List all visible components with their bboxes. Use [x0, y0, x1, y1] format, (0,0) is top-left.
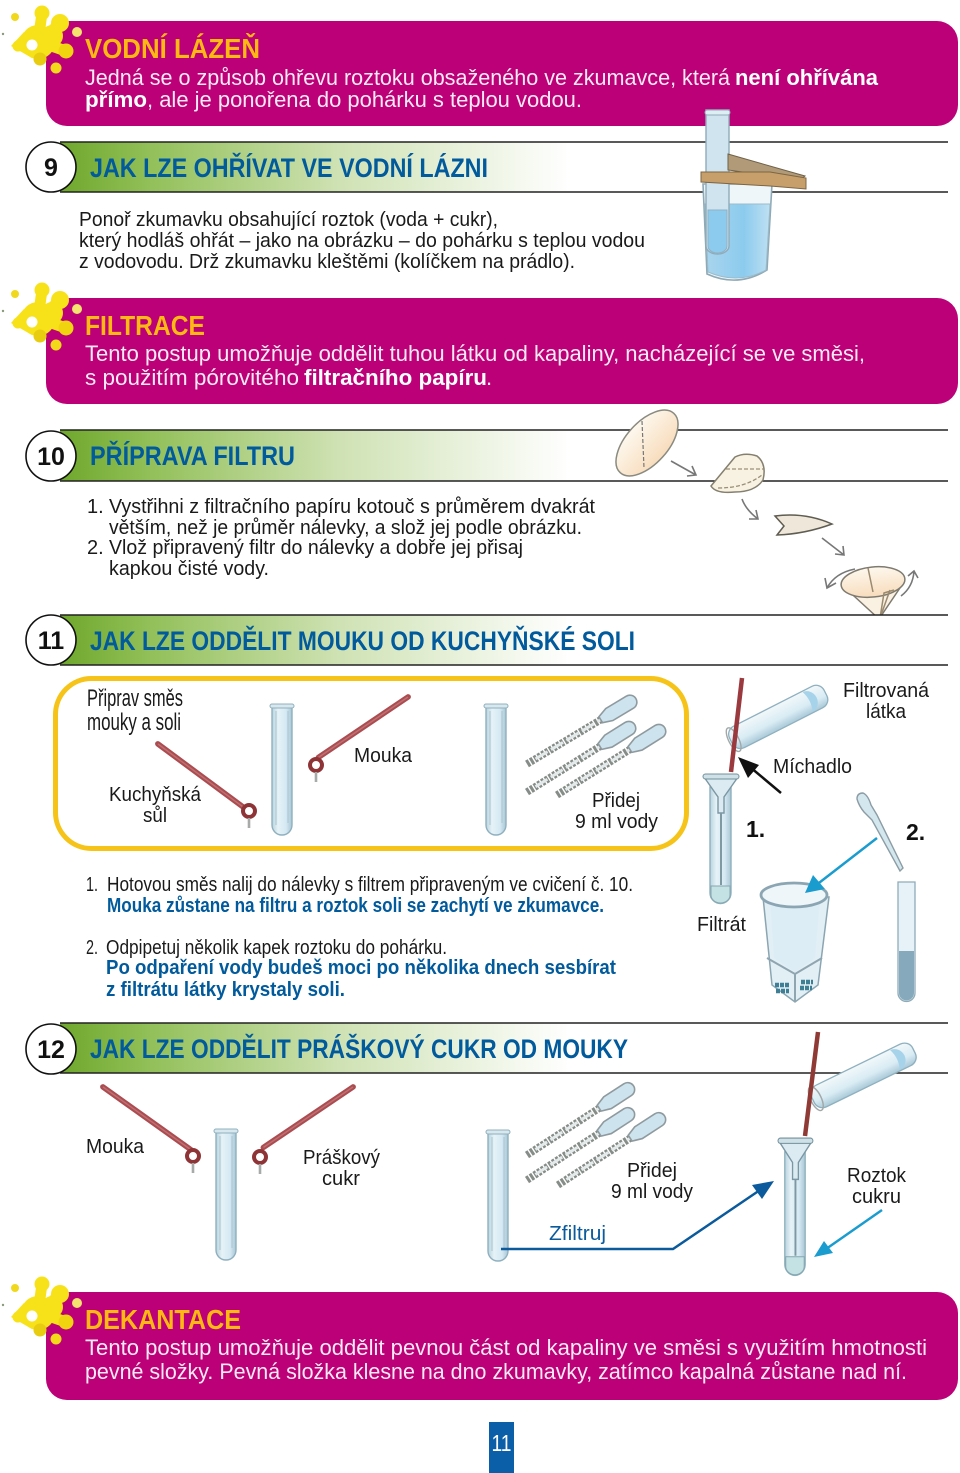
illustration: filtering step 2 [761, 793, 925, 1002]
panel: vodní lázeň [2, 6, 958, 126]
heading: dekantace: DEKANTACE [85, 1304, 241, 1335]
icon: sugar spatula [254, 1087, 353, 1174]
icon: test tube with solution [898, 882, 915, 1002]
arrow: pipette to beaker [805, 838, 877, 893]
panel: dekantace [2, 1276, 958, 1400]
page number [489, 1422, 514, 1473]
icon: yellow splash [2, 6, 82, 74]
number 9: 9 [44, 154, 58, 182]
icon: beaker with crystals [761, 883, 829, 1002]
number 11: 11 [38, 627, 64, 655]
label: sugar solution: cukru [852, 1186, 901, 1208]
icon: salt spatula [158, 744, 255, 828]
text block: section 9 instructions: který hodláš ohřát – jako na obrázku – do pohárku s teplou vodou [79, 230, 645, 252]
text block: section 11 instructions: z filtrátu látky krystaly soli. [106, 979, 345, 1001]
icon: half fold [711, 454, 764, 492]
label: powdered sugar: Práškový [303, 1147, 380, 1169]
text block: section 11 instructions: Odpipetuj několik kapek roztoku do pohárku. [106, 937, 447, 959]
text: bold emphasis: není ohřívána [735, 65, 879, 90]
icon: funnel in test tube [778, 1138, 813, 1275]
text block: section 11 instructions: Hotovou směs nalij do nálevky s filtrem připraveným ve cvičení č. 10. [107, 874, 633, 896]
text: bold emphasis line 2: přímo [85, 87, 147, 112]
arrows between the folding steps [671, 461, 918, 596]
text block: section 11 instructions [86, 874, 633, 1001]
panel: prepare mixture [56, 678, 686, 848]
label: prepare mixture [87, 685, 183, 736]
icon: yellow splash [2, 282, 82, 350]
text block: section 10 steps: větším, než je průměr nálevky, a slož jej podle obrázku. [109, 517, 582, 539]
text block: section 10 steps: kapkou čisté vody. [109, 558, 269, 580]
text: bold emphasis: filtračního papíru [304, 365, 487, 390]
icon: three pipettes [523, 693, 668, 801]
label: filtrate: Filtrát [697, 914, 746, 936]
text block: section 11 instructions: 2. [86, 937, 98, 959]
label: salt: Kuchyňská [109, 784, 202, 806]
text: description line 2: , ale je ponořena do pohárku s teplou vodou. [147, 87, 582, 112]
text: description line 2: s použitím pórovitého [85, 365, 299, 390]
text: period: . [486, 365, 492, 390]
label: flour: Mouka [86, 1136, 145, 1158]
icon: flour spatula [310, 697, 408, 782]
label: salt: sůl [143, 805, 167, 827]
text block: section 10 steps: 2. [87, 537, 104, 559]
label: filtered substance: látka [866, 701, 907, 723]
text block: section 10 steps: Vystřihni z filtračního papíru kotouč s průměrem dvakrát [109, 496, 595, 518]
text block: section 9 instructions: z vodovodu. Drž zkumavku kleštěmi (kolíčkem na prádlo). [79, 251, 575, 273]
label: filtered substance [843, 680, 930, 723]
text block: section 11 instructions: 1. [86, 874, 98, 896]
label: add water: 9 ml vody [611, 1181, 693, 1203]
icon: funnel in test tube [703, 774, 739, 904]
number 10: 10 [37, 443, 65, 471]
heading: filtrace: FILTRACE [85, 310, 205, 341]
icon: quarter fold [775, 515, 832, 535]
text: description line 2: pevné složky. Pevná složka klesne na dno zkumavky, zatímco kapalná zůstane nad ní. [85, 1359, 907, 1384]
label: filter: Zfiltruj [549, 1223, 606, 1245]
text block: section 9 instructions [79, 209, 645, 273]
label: add water [575, 790, 658, 833]
label: sugar solution: Roztok [847, 1165, 907, 1187]
icon: stirring rod [805, 1032, 818, 1136]
label: sugar solution [847, 1165, 907, 1208]
text block: section 10 steps [87, 496, 595, 580]
heading: section 11: JAK LZE ODDĚLIT MOUKU OD KUCHYŇSKÉ SOLI [90, 625, 635, 656]
icon: three pipettes [523, 1080, 668, 1191]
heading: vodní lázeň: VODNÍ LÁZEŇ [85, 33, 260, 64]
icon: test tube [214, 1129, 238, 1260]
label: filtered substance: Filtrovaná [843, 680, 930, 702]
icon: test tube [486, 1130, 510, 1261]
heading: section 9: JAK LZE OHŘÍVAT VE VODNÍ LÁZNI [90, 152, 488, 183]
label: prepare mixture: mouky a soli [87, 709, 181, 736]
icon: filter cone [840, 564, 906, 619]
label: powdered sugar: cukr [322, 1168, 360, 1190]
label: add water: Přidej [592, 790, 640, 812]
icon: stirring rod [731, 678, 742, 772]
icon: pipette [857, 793, 903, 871]
label: add water: Přidej [627, 1160, 677, 1182]
label: flour: Mouka [354, 745, 413, 767]
number 12: 12 [37, 1036, 65, 1064]
label: add water: 9 ml vody [575, 811, 658, 833]
section header 9 [26, 142, 948, 192]
label: step 2: 2. [906, 819, 925, 845]
illustration: filtering step 1 [697, 678, 930, 936]
label: powdered sugar [303, 1147, 380, 1190]
text block: section 11 instructions: Po odpaření vody budeš moci po několika dnech sesbírat [106, 957, 616, 979]
arrow: to sugar solution [814, 1210, 882, 1257]
icon: test tube [484, 704, 508, 835]
label: prepare mixture: Připrav směs [87, 685, 183, 712]
panel: filtrace [2, 282, 958, 404]
icon: pouring test tube [723, 681, 831, 753]
illustration: sugar and flour separation [86, 1032, 920, 1275]
section header 11 [26, 615, 948, 665]
text block: section 11 instructions: Mouka zůstane na filtru a roztok soli se zachytí ve zkumavce. [107, 895, 604, 917]
section header 10 [26, 430, 948, 481]
arrow: to stirring rod [738, 757, 781, 793]
text: description line 1: Tento postup umožňuje oddělit pevnou část od kapaliny ve směsi s využitím hmotnosti [85, 1335, 927, 1360]
page number: 11 [492, 1430, 512, 1456]
heading: section 12: JAK LZE ODDĚLIT PRÁŠKOVÝ CUKR OD MOUKY [90, 1033, 628, 1064]
label: add water [611, 1160, 693, 1203]
icon: pouring test tube [805, 1039, 920, 1113]
label: stirring rod: Míchadlo [773, 756, 852, 778]
section header 12 [26, 1023, 948, 1074]
label: salt [109, 784, 202, 827]
arrow: filter step [501, 1181, 774, 1249]
text block: section 10 steps: Vlož připravený filtr do nálevky a dobře jej přisaj [109, 537, 523, 559]
icon: flour spatula [103, 1087, 199, 1173]
text: description line 1: Tento postup umožňuje oddělit tuhou látku od kapaliny, nacházející se ve směsi, [85, 341, 865, 366]
heading: section 10: PŘÍPRAVA FILTRU [90, 440, 295, 471]
icon: paper disc [605, 399, 689, 487]
illustration: folding the filter paper [605, 399, 918, 619]
illustration: water bath beaker with test tube and clothespin [701, 110, 806, 280]
icon: yellow splash [2, 1276, 82, 1344]
text: description line 1: Jedná se o způsob ohřevu roztoku obsaženého ve zkumavce, která [85, 65, 731, 90]
text block: section 10 steps: 1. [87, 496, 104, 518]
icon: test tube [270, 704, 294, 835]
text block: section 9 instructions: Ponoř zkumavku obsahující roztok (voda + cukr), [79, 209, 498, 231]
label: step 1: 1. [746, 816, 765, 842]
